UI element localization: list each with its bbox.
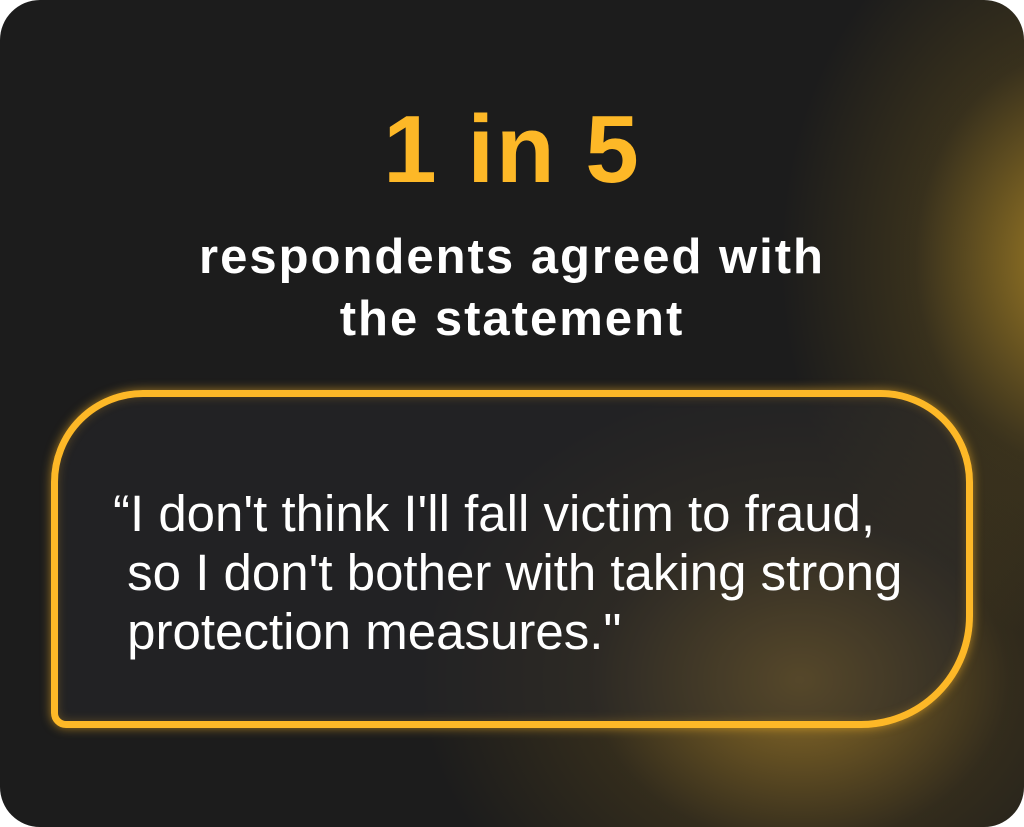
quote text: protection measures." <box>127 603 622 660</box>
title: 1 in 5: 1 in 5 <box>383 96 641 203</box>
subtitle <box>199 230 825 346</box>
quote text <box>113 485 902 660</box>
quote text: so I don't bother with taking strong <box>127 544 902 601</box>
subtitle: the statement <box>340 292 684 346</box>
subtitle: respondents agreed with <box>199 230 825 284</box>
quote text: “I don't think I'll fall victim to fraud, <box>113 485 875 542</box>
panel: quote box <box>51 390 973 728</box>
